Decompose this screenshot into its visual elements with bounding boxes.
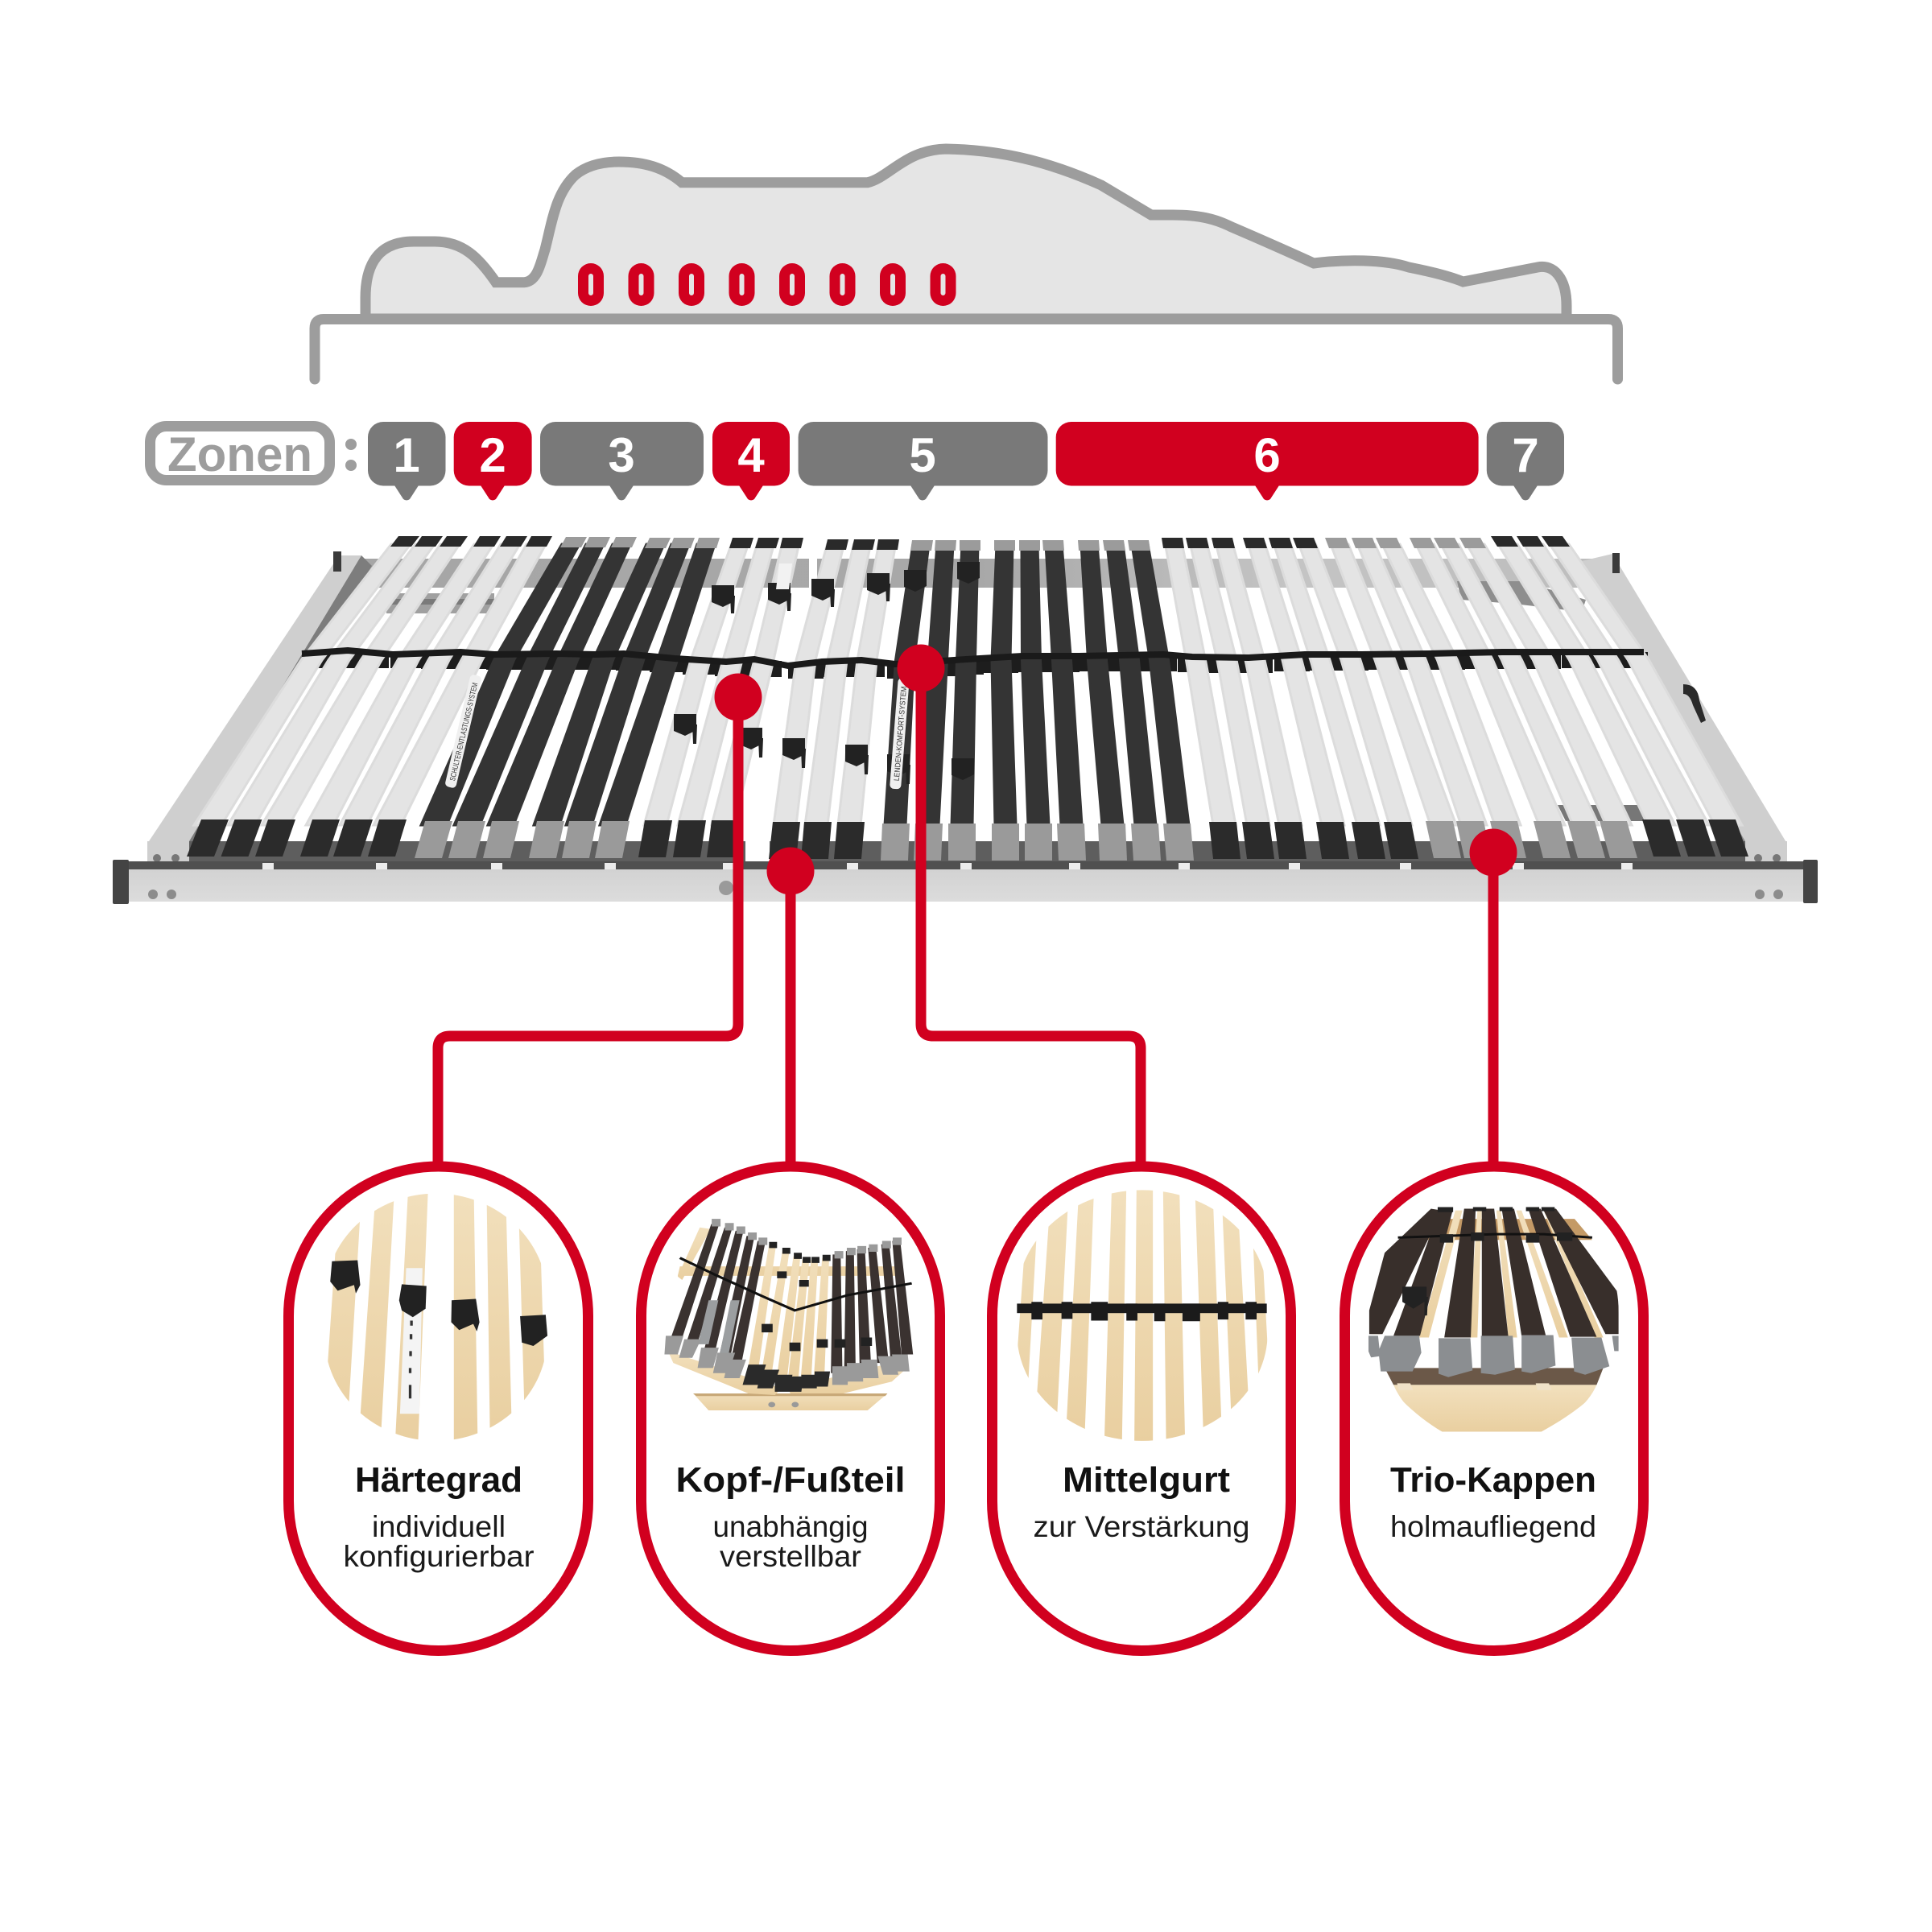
heading: Härtegrad: [355, 1460, 522, 1500]
photo: adjustable frame: [664, 1219, 913, 1410]
colon: [345, 439, 357, 471]
pill outline: [641, 1166, 940, 1650]
rear band: [147, 841, 1787, 862]
zone 2: [454, 422, 532, 501]
description: holmaufliegend: [1390, 1510, 1596, 1543]
label: Schulter-Entlastungs-System: SCHULTER-ENTLASTUNGS-SYSTEM: [448, 682, 480, 782]
panel: Mittelgurt: [992, 1166, 1291, 1650]
light slats: [194, 544, 1742, 825]
mattress body silhouette: [365, 149, 1567, 319]
pill outline: [992, 1166, 1291, 1650]
dark slats: [421, 544, 1189, 825]
connector: Kopf-/Fußteil: [766, 847, 815, 1166]
zone 7: 7: [1512, 428, 1539, 482]
zone 5: 5: [909, 428, 936, 482]
zone 3: [540, 422, 704, 501]
centre strap: [302, 650, 1644, 666]
zone 7: [1487, 422, 1564, 501]
description line 2: verstellbar: [720, 1540, 861, 1573]
strap clip blocks: [302, 652, 1648, 679]
photo: trio caps: [1368, 1207, 1619, 1432]
pill outline: [1344, 1166, 1644, 1650]
mattress profile: [315, 149, 1618, 379]
heading: Kopf-/Fußteil: [676, 1460, 905, 1500]
bed base line: [315, 319, 1618, 379]
zone 6: [1056, 422, 1479, 501]
pill outline: [288, 1166, 588, 1650]
hardness regulator clips: [674, 562, 980, 784]
bottom slat caps grey: [415, 821, 1637, 861]
photo: slats with clips: [322, 1185, 547, 1443]
photo: slats with centre strap: [1014, 1185, 1269, 1443]
infographic canvas: [113, 143, 1818, 1656]
heading: Trio-Kappen: [1390, 1460, 1596, 1500]
zone 4: 4: [737, 428, 765, 482]
adjustment mechanisms: [1457, 581, 1646, 821]
zone 2: 2: [479, 428, 506, 482]
red connector lines and markers: [438, 644, 1517, 1166]
zones legend: [150, 422, 1564, 501]
connector: Mittelgurt: [897, 644, 1141, 1166]
description line 2: konfigurierbar: [343, 1540, 535, 1573]
front rail: [113, 860, 1818, 904]
panel: Trio-Kappen: [1344, 1166, 1644, 1650]
zone 1: [368, 422, 446, 501]
label: Lenden-Komfort-System: LENDEN-KOMFORT-SYSTEM: [893, 686, 909, 782]
zone 6: 6: [1253, 428, 1281, 482]
top slat caps grey: [560, 537, 1486, 551]
description line 1: unabhängig: [713, 1510, 868, 1543]
description line 1: individuell: [372, 1510, 506, 1543]
zone 5: [799, 422, 1048, 501]
zone 4: [712, 422, 790, 501]
back rail: [354, 559, 1602, 613]
zone 3: 3: [608, 428, 635, 482]
side rails: [147, 551, 1787, 844]
connector: Härtegrad: [438, 673, 762, 1166]
slatted bed frame: [113, 536, 1818, 904]
bottom slat caps black: [187, 819, 1748, 859]
label: Schulter-Entlastungs-System: [444, 674, 481, 789]
red spring elements: [578, 263, 956, 306]
Zonen label: Zonen: [167, 427, 312, 481]
heading: Mittelgurt: [1063, 1460, 1230, 1500]
zone 1: 1: [393, 428, 420, 482]
panel: Kopf-/Fußteil: [641, 1166, 940, 1650]
top slat caps black: [390, 536, 1570, 550]
connector: Trio-Kappen: [1470, 829, 1517, 1166]
panel: Härtegrad: [288, 1166, 588, 1650]
description: zur Verstärkung: [1034, 1510, 1249, 1543]
scale label on slat: [776, 564, 792, 589]
